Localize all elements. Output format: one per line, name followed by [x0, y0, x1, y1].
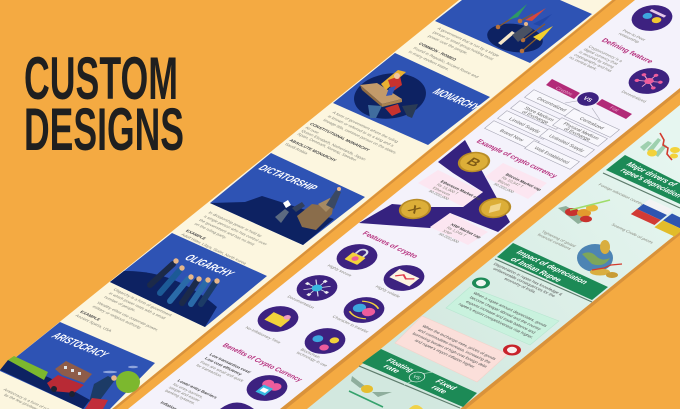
- caption: foreign education: Foreign education country: [597, 182, 646, 206]
- text: defining feature: Cryptocurrency is a: [587, 44, 625, 63]
- card: ripple example: [430, 213, 488, 249]
- right column: of Exchange: [562, 127, 592, 142]
- icon: lower barriers: [220, 402, 254, 409]
- icon: resistant to transfer: [335, 292, 393, 328]
- section: dictatorship text: the government and has no limit: [198, 218, 257, 247]
- card: ethereum example: Rs 16,900 T: [435, 183, 460, 196]
- card: negative impact: and commodities increase, increasing the: [417, 328, 493, 365]
- captions: features: Character to transfer: [331, 314, 371, 334]
- icon: low cost: [238, 370, 296, 406]
- card: ripple example: XRP Market cap: [449, 222, 483, 239]
- section: oligarchy text: in which power rests with a small: [108, 291, 167, 320]
- section: dictatorship text: on the ruling party.: [193, 222, 228, 239]
- text: defining feature: no central bank.: [568, 55, 599, 71]
- heading: features of crypto: Features of crypto: [360, 230, 421, 260]
- card: ethereum example: Ethereum: [431, 186, 452, 197]
- caption: peer to peer: relationship: [617, 32, 641, 44]
- caption: tightening of global financial conditions: financial conditions: [536, 233, 572, 251]
- band: floating vs fixed: rate: [381, 363, 402, 375]
- section: dictatorship text: In dictatorship power is held by: [207, 210, 264, 238]
- right column: Unlimited Supply: [547, 134, 586, 154]
- band: floating vs fixed: [359, 349, 477, 408]
- band: impact of depreciation: of Indian Rupee: [508, 256, 564, 284]
- band: floating vs fixed: Floating: [384, 357, 416, 374]
- section: dictatorship text: Adolf Hitler, Libya, Stalin, North Korea: [180, 233, 248, 266]
- caption: tightening of global financial conditions: Tightening of global: [540, 229, 577, 248]
- section: oligarchy text: Wealthy elites use corporate power,: [96, 301, 160, 332]
- icon: peer to peer: [623, 0, 680, 36]
- card: bitcoin example: [485, 163, 547, 201]
- card: ripple example: 50,000,000: [438, 232, 461, 244]
- icon: thumb up: [472, 278, 490, 288]
- section: dictatorship text: a single person who has control over: [203, 214, 269, 246]
- illustration: flags: [485, 4, 553, 56]
- heading: example of crypto currency: Example of crypto currency: [474, 138, 560, 180]
- icon: vs: VS: [581, 96, 593, 103]
- card: bitcoin example: Bitcoin: [496, 179, 512, 187]
- text: benefits 1: Low transaction cost/: [208, 352, 253, 374]
- text: impact intro: Depreciation in rupee has knowledge &: [492, 262, 564, 296]
- icon: ethereum coin: [472, 194, 518, 222]
- caption: decentralised: Decentralized: [620, 89, 648, 104]
- coins: [392, 148, 518, 223]
- right column: Centralized: [577, 116, 605, 131]
- caption: soaring crude oil prices: Soaring Crude oil prices: [610, 222, 655, 244]
- heading: defining feature: Defining feature: [599, 37, 656, 65]
- icon: thumb down: [503, 344, 521, 356]
- illustration: monarch on throne: [339, 64, 441, 128]
- text: impact intro: economy of India.: [503, 277, 538, 294]
- section: top text: COMMON - ROMEO: [418, 42, 458, 62]
- captions: features: No-Inflationary Time: [244, 325, 283, 345]
- section: monarchy text: CONSTITUTIONAL MONARCHY: [309, 122, 371, 152]
- card: positive impact: When a rupee amount depreciates, goods: [472, 291, 548, 328]
- band: major drivers: [603, 155, 680, 208]
- title: custom designs: CUSTOM: [24, 45, 178, 112]
- title: custom designs: [24, 45, 184, 163]
- text: benefits 1: for transaction.: [195, 363, 224, 378]
- title: custom designs: DESIGNS: [24, 96, 184, 163]
- card: positive impact: [446, 287, 559, 345]
- section: monarchy text: Queen Elizabeth, Netherlands, Japan: [300, 129, 368, 161]
- section: oligarchy text: Ancient Sparta, USA: [74, 314, 113, 333]
- illustration: group of people: [150, 258, 220, 304]
- icon: decentralised network: [620, 63, 678, 99]
- card: ethereum example: Ethereum Market cap: [439, 179, 483, 201]
- card: negative impact: [395, 316, 508, 382]
- section: monarchy text: [284, 108, 408, 181]
- band: floating vs fixed: rate: [429, 384, 449, 395]
- left column: [485, 90, 579, 149]
- text: benefits 1: Low cost efficiency: [204, 356, 244, 376]
- icon: blockchain: [296, 323, 354, 359]
- label: oligarchy: OLIGARCHY: [182, 252, 238, 279]
- section: top text: in many modern states.: [407, 50, 451, 71]
- icon: bitcoin coin: B: [463, 155, 485, 169]
- section: monarchy panel: [333, 53, 490, 145]
- section: top text: [407, 26, 505, 83]
- section: top text: power over the people.: [427, 34, 470, 55]
- icon: ripple coin: X: [405, 203, 425, 216]
- card: ethereum example: 80,000,000: [428, 189, 451, 201]
- text: impact intro: unfavourable consequences for the: [492, 267, 557, 298]
- card: ripple example: Rs 1,045 T: [445, 226, 468, 238]
- text: defining feature: [568, 43, 625, 76]
- illustration: globe and coins: [577, 240, 622, 278]
- illustration: dictator and statue: [275, 187, 341, 230]
- section: dictatorship text: [180, 210, 276, 266]
- illustration: winged coin: [349, 376, 423, 409]
- section: top text: A government that is run by a single: [436, 26, 501, 58]
- section: dictatorship panel: [210, 153, 365, 245]
- icon: no inflation: [249, 301, 307, 337]
- label: aristocracy: ARISTOCRACY: [48, 330, 112, 360]
- left column: Limited Supply: [507, 117, 542, 135]
- card: positive impact: become cheaper abroad and the country: [468, 295, 543, 331]
- illustration: coin plant: [558, 200, 610, 224]
- captions: features: [244, 263, 402, 368]
- heading: benefits: Benefits of Crypto Currency: [220, 342, 305, 383]
- card: bitcoin example: Rs 10,547 T: [500, 176, 525, 189]
- label: crypto: Cryptos: [554, 86, 574, 97]
- panel: rupee strip: [307, 105, 680, 409]
- band: impact of depreciation: Impact of depreciation: [514, 249, 590, 286]
- band: floating vs fixed: Fixed: [433, 378, 459, 392]
- section: dictatorship text: EXAMPLE: [185, 229, 207, 241]
- section: monarchy text: ABSOLUTE MONARCHY: [288, 138, 338, 162]
- text: defining feature: is secured by strong: [578, 50, 616, 69]
- captions: features: Highly secure: [326, 263, 354, 278]
- section: mint background: [307, 105, 680, 409]
- right column: Physical Medium: [561, 122, 600, 141]
- illustration: falling chart: [640, 133, 680, 160]
- text: defining feature: cryptography and has: [573, 53, 613, 73]
- section: monarchy text: Spain, Denmark, Norway, Sweden: [296, 132, 359, 162]
- section: oligarchy text: EXAMPLE: [79, 310, 102, 322]
- icon: highly volatile: [375, 260, 433, 296]
- comparison: crypto vs fiat: [485, 79, 632, 169]
- band: floating vs fixed: VS: [411, 374, 422, 381]
- section: top text: person or small group holding most: [432, 30, 496, 61]
- text: benefits 2: No entry barriers,: [172, 382, 205, 399]
- card: negative impact: borrowing burden of high-cost foreign debt: [411, 331, 489, 369]
- feature icons: [249, 239, 433, 359]
- card: ethereum example: [418, 170, 483, 210]
- text: benefits 2: simple and easier: [168, 385, 202, 403]
- section: oligarchy panel: [110, 233, 267, 327]
- section: oligarchy text: military or religious authority.: [91, 304, 143, 330]
- right column: Well Established: [532, 146, 570, 165]
- caption: peer to peer: Peer-to-Peer: [621, 28, 647, 42]
- left column: Brand New: [498, 129, 525, 143]
- section: aristocracy panel: [0, 322, 155, 409]
- captions: features: Blockchain: [299, 347, 322, 359]
- card: negative impact: When the exchange rises, prices of goods: [421, 324, 497, 361]
- card: positive impact: exports increase and trade balance and: [465, 300, 538, 335]
- section: top blue panel: [435, 0, 592, 63]
- text: benefits 2: [164, 378, 219, 409]
- text: benefits 2: Lower-entry Barriers: [176, 378, 219, 400]
- label: fiat: Fiat: [608, 106, 620, 113]
- card: positive impact: rupee's export competitiveness rise higher.: [457, 302, 535, 339]
- icon: documentation: [288, 270, 346, 306]
- section: oligarchy text: [74, 286, 176, 346]
- right column: [525, 109, 619, 169]
- text: defining feature: digital currency that: [582, 47, 620, 66]
- card: bitcoin example: 50,000,000: [493, 182, 516, 194]
- captions: features: Highly volatile: [374, 284, 402, 299]
- left column: of Exchange: [520, 110, 550, 125]
- icon: vs: [573, 90, 603, 108]
- text: benefits 2: banking systems.: [164, 389, 197, 405]
- card: negative impact: and rupee's import inflation higher.: [413, 338, 477, 369]
- illustration: flags: [631, 199, 680, 236]
- label: dictatorship: DICTATORSHIP: [256, 163, 320, 193]
- section: monarchy text: All over.: [304, 126, 321, 135]
- captions: features: Documentation: [286, 294, 316, 310]
- icon: highly secure: [328, 239, 386, 275]
- left column: Store Medium: [522, 106, 555, 123]
- section: oligarchy text: number of people.: [103, 295, 138, 312]
- section: monarchy text: is known or referred to as a king and a: [327, 114, 396, 148]
- shape: purple band: [359, 140, 510, 232]
- label: monarchy: MONARCHY: [430, 86, 484, 113]
- left column: Decentralized: [535, 96, 568, 113]
- section: top text: Found in Republic, Ancient Rome and: [412, 46, 481, 79]
- band: impact of depreciation: [495, 243, 608, 302]
- section: monarchy text: Saudi Arabia: [284, 142, 310, 155]
- section: monarchy text: lineage title, common person on the states.: [322, 118, 399, 155]
- section: oligarchy text: Oligarchy is a form of government: [112, 287, 174, 317]
- section: monarchy text: A form of government where the ruling: [331, 110, 400, 144]
- text: benefits 1: Fees are small and quick: [199, 360, 246, 383]
- card: bitcoin example: Bitcoin Market cap: [504, 172, 543, 192]
- captions: features: technology in use: [295, 351, 330, 368]
- card: ripple example: XRP: [441, 229, 453, 236]
- caption: peer to peer: [617, 28, 647, 45]
- text: benefits 1: [195, 352, 255, 386]
- illustration: car and mansion: [47, 361, 140, 409]
